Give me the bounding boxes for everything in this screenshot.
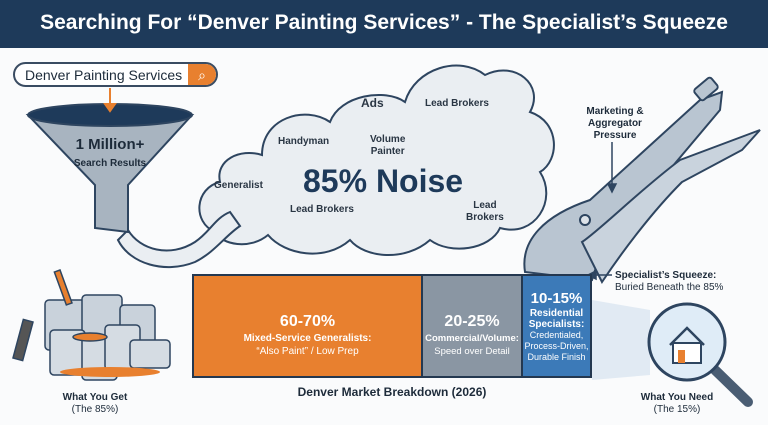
noise label: 85% Noise bbox=[303, 163, 463, 199]
market bar bbox=[192, 274, 592, 378]
caption: what you get: What You Get bbox=[63, 392, 127, 403]
cloud labels: Volume bbox=[370, 134, 405, 145]
cloud labels: Lead Brokers bbox=[425, 98, 489, 109]
caption: what you need bbox=[640, 392, 713, 415]
arrow: pressure bbox=[608, 142, 616, 192]
cloud labels: Lead bbox=[473, 200, 497, 211]
caption: what you need: (The 15%) bbox=[654, 404, 700, 415]
label: pressure: Aggregator bbox=[588, 118, 642, 129]
cloud labels: Ads bbox=[361, 96, 384, 110]
segment: commercial: Commercial/Volume: bbox=[425, 333, 519, 344]
cloud labels: Generalist bbox=[214, 180, 263, 191]
segment: specialists: Durable Finish bbox=[527, 352, 586, 362]
search box bbox=[13, 62, 218, 87]
cloud: noise bbox=[118, 66, 554, 267]
segment: specialists: Process-Driven, bbox=[524, 341, 588, 351]
segment: commercial bbox=[423, 276, 523, 376]
funnel text: Search Results bbox=[74, 158, 146, 169]
caption: what you need: What You Need bbox=[641, 392, 713, 403]
arrow: squeeze bbox=[588, 271, 612, 279]
segment: generalists: Mixed-Service Generalists: bbox=[244, 333, 371, 344]
title bar: Searching For “Denver Painting Services” - The Specialist’s Squeeze bbox=[40, 11, 728, 34]
segment: generalists: 60-70% bbox=[280, 313, 335, 330]
cloud labels: Brokers bbox=[466, 212, 504, 223]
label: pressure bbox=[586, 106, 644, 141]
funnel text: 1 Million+ bbox=[76, 136, 144, 153]
pliers bbox=[524, 77, 760, 282]
segment: generalists bbox=[194, 276, 423, 376]
funnel bbox=[28, 104, 192, 232]
cloud labels: Handyman bbox=[278, 136, 329, 147]
segment: specialists: 10-15% bbox=[531, 290, 582, 307]
label: squeeze: Buried Beneath the 85% bbox=[615, 282, 723, 293]
cloud labels: Painter bbox=[371, 146, 405, 157]
magnifier icon bbox=[649, 304, 748, 402]
segment: specialists: Credentialed, bbox=[530, 330, 583, 340]
label: pressure: Pressure bbox=[594, 130, 636, 141]
search box: Denver Painting Services bbox=[25, 67, 182, 83]
segment: specialists: Specialists: bbox=[529, 319, 584, 330]
segment: commercial: Speed over Detail bbox=[434, 346, 510, 357]
label: squeeze: Specialist’s Squeeze: bbox=[615, 270, 716, 281]
segment: specialists: Residential bbox=[530, 308, 583, 319]
paint cans bbox=[13, 270, 170, 380]
label: pressure: Marketing & bbox=[586, 106, 644, 117]
caption: what you get bbox=[62, 392, 128, 415]
search box: ⌕ bbox=[198, 67, 206, 83]
beam light bbox=[592, 300, 650, 380]
arrow: search to funnel bbox=[105, 88, 115, 111]
bar caption: Denver Market Breakdown (2026) bbox=[298, 385, 486, 399]
title bar bbox=[0, 0, 768, 48]
funnel text bbox=[74, 136, 146, 169]
caption: what you get: (The 85%) bbox=[72, 404, 118, 415]
label: squeeze bbox=[615, 270, 724, 293]
cloud labels: Lead Brokers bbox=[290, 204, 354, 215]
segment: generalists: “Also Paint” / Low Prep bbox=[256, 346, 359, 357]
segment: commercial: 20-25% bbox=[444, 313, 500, 330]
segment: specialists bbox=[523, 276, 590, 376]
